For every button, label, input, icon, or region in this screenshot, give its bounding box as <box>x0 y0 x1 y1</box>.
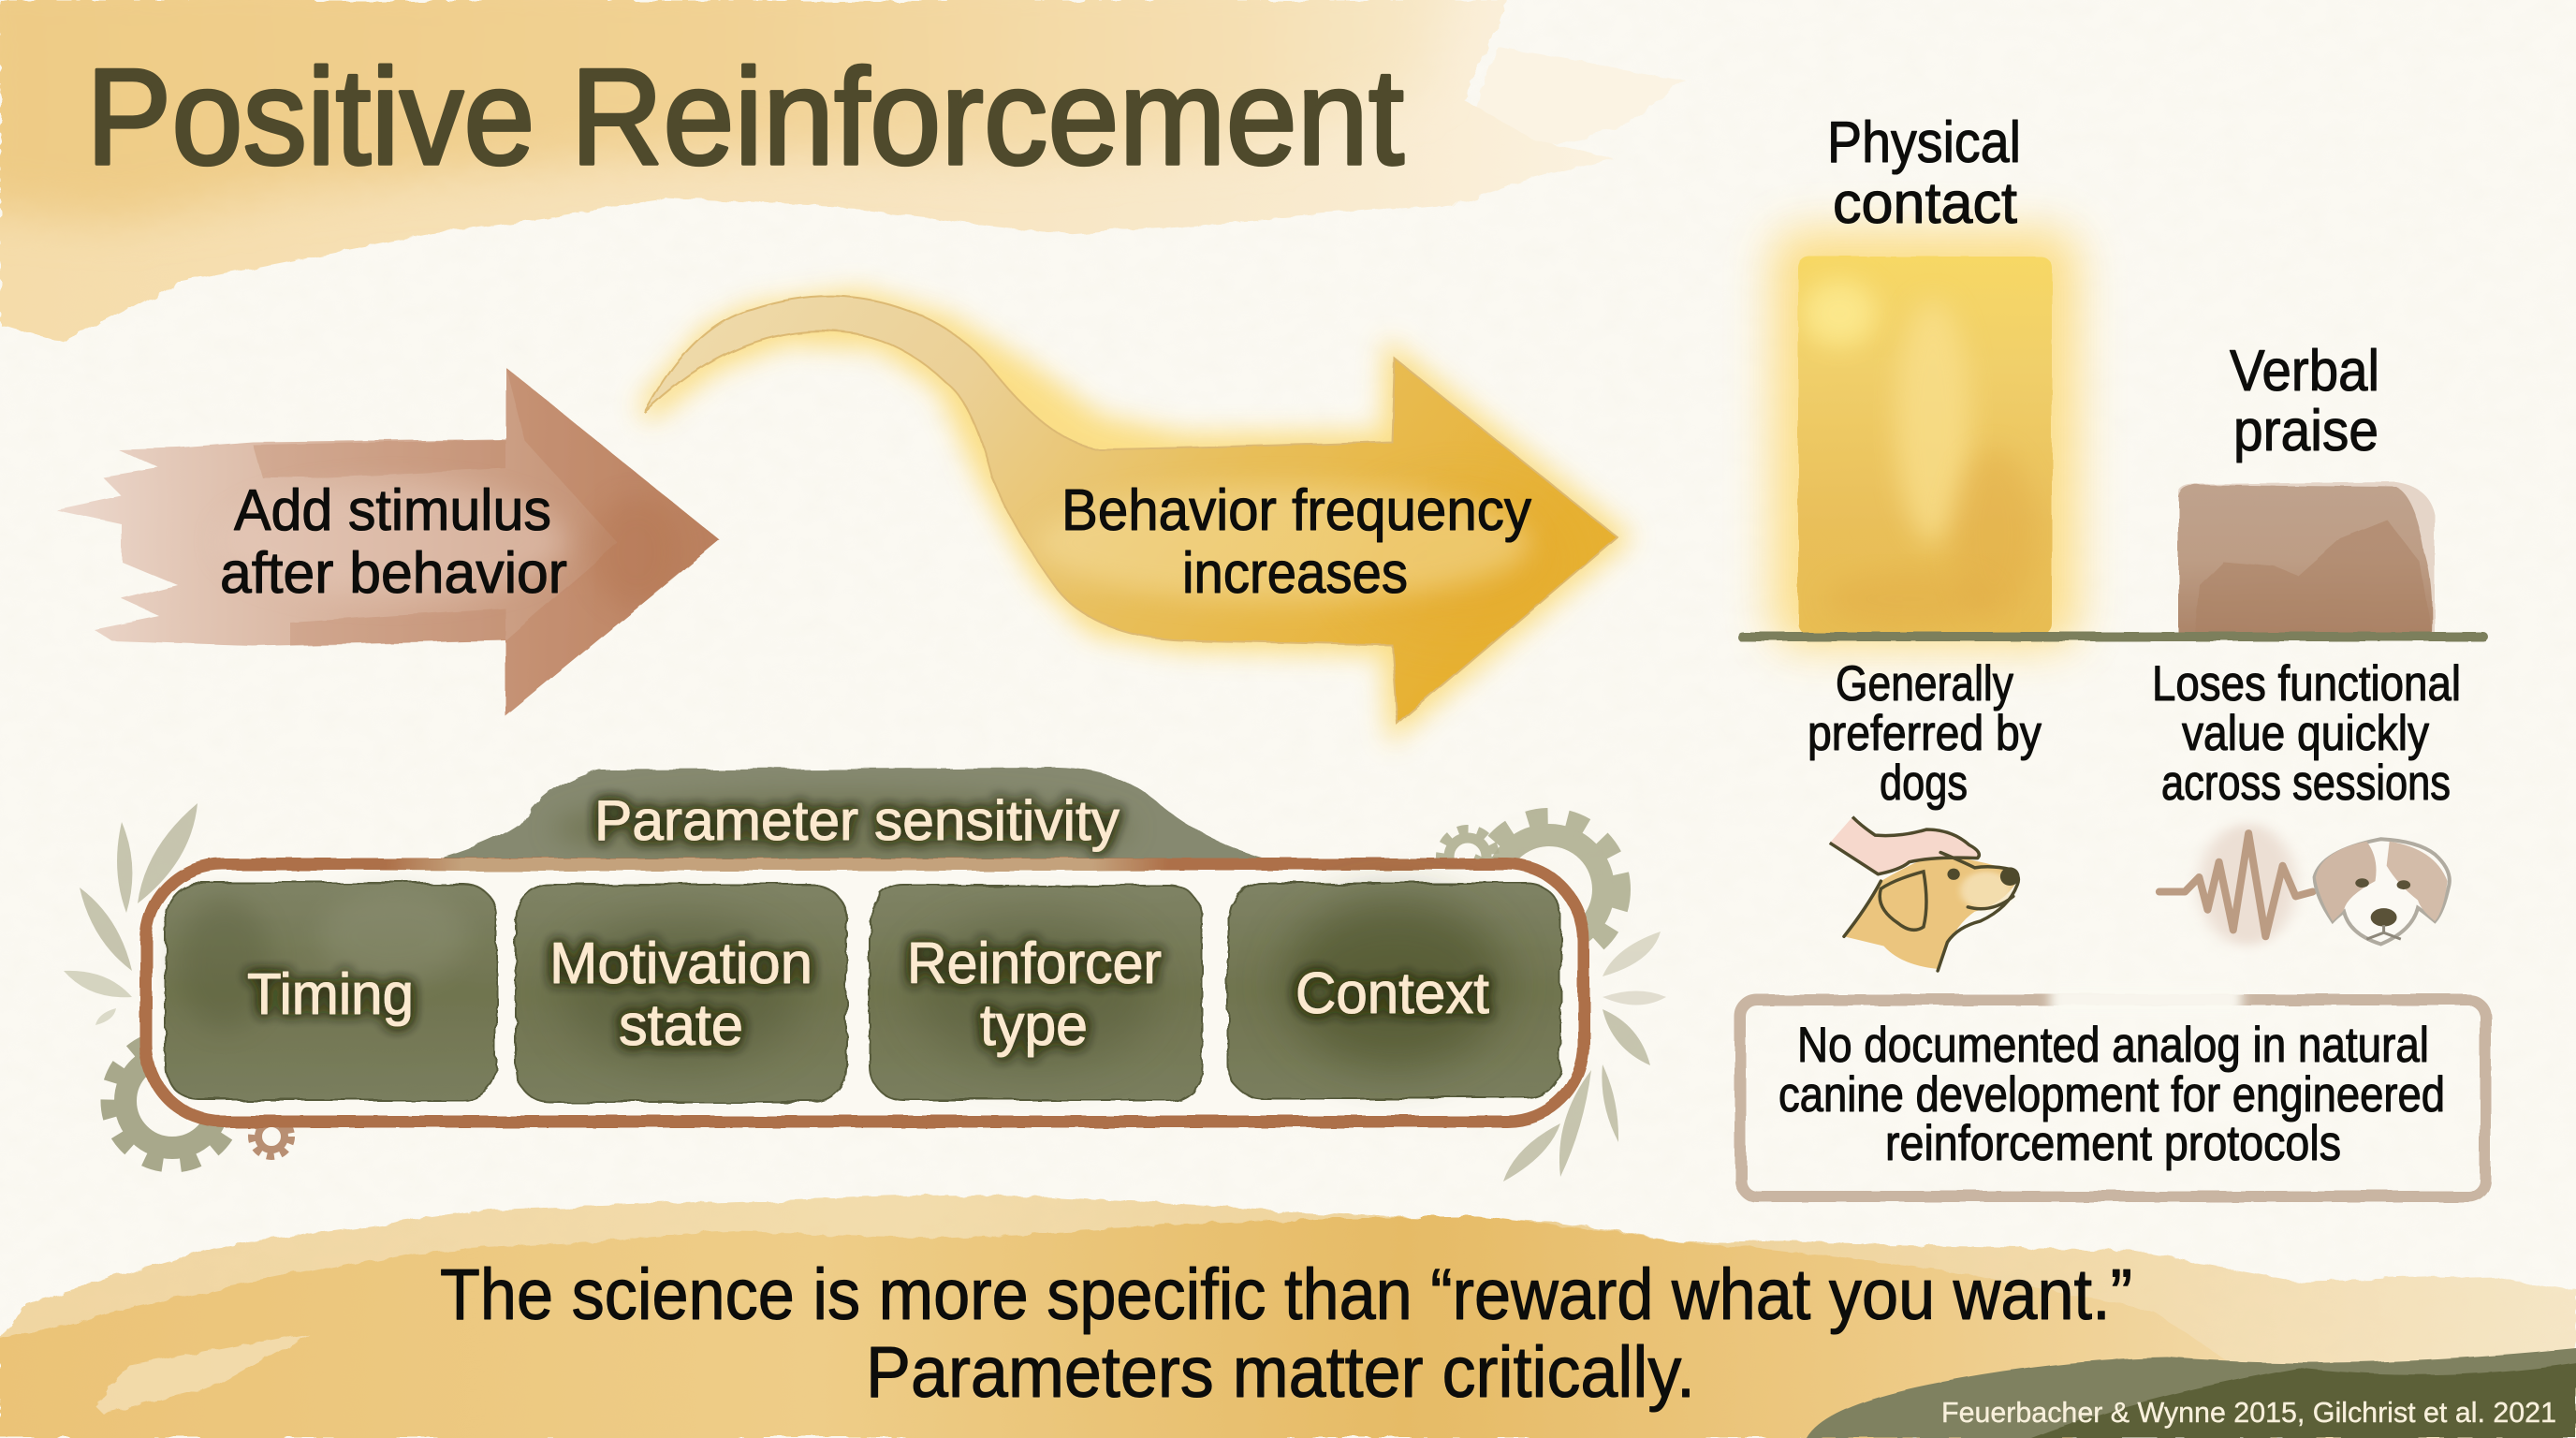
decorative: gears and leaves <box>64 803 1666 1181</box>
label: verbal praise: Verbal <box>2230 339 2379 404</box>
leaves: right branch <box>1503 932 1666 1181</box>
caption: physical contact: preferred by <box>1808 706 2042 761</box>
tab: parameter sensitivity <box>412 768 1261 875</box>
label: verbal praise: praise <box>2233 399 2378 463</box>
caption: verbal praise: Loses functional <box>2152 656 2461 712</box>
bar: physical contact <box>1772 230 2078 647</box>
bottom watercolor wash <box>0 1194 2576 1438</box>
card: motivation state: Motivation <box>549 932 812 996</box>
gear: bottom left small brown <box>252 1117 291 1156</box>
citation corner <box>1807 1348 2576 1438</box>
arrow label: behavior frequency <box>1061 478 1531 606</box>
frame: rounded brown border <box>146 858 1584 1122</box>
caption: verbal praise: across sessions <box>2161 756 2451 811</box>
leaves: left branch <box>64 803 198 1025</box>
tab: parameter sensitivity: Parameter sensitivity <box>594 789 1120 852</box>
arrow label: add stimulus: after behavior <box>220 541 567 606</box>
title: Positive Reinforcement <box>86 40 1404 193</box>
bottom takeaway: The science is more specific than “reward what you want.” <box>440 1255 2132 1335</box>
label: verbal praise <box>2230 339 2379 463</box>
card: context <box>1228 883 1560 1098</box>
label: physical contact <box>1827 110 2021 236</box>
card: motivation state: state <box>619 993 743 1058</box>
callout: no documented analog: canine development for engineered <box>1778 1067 2445 1123</box>
label: physical contact: contact <box>1833 171 2017 236</box>
baseline <box>1737 632 2488 641</box>
callout: no documented analog: No documented analog in natural <box>1797 1018 2429 1073</box>
arrow label: behavior frequency: Behavior frequency <box>1061 478 1531 543</box>
card: timing <box>166 883 496 1100</box>
arrow label: add stimulus <box>220 478 567 606</box>
panel: parameter sensitivity <box>146 768 1584 1122</box>
caption: physical contact: Generally <box>1836 656 2013 712</box>
card: context: Context <box>1295 961 1489 1026</box>
icon: dog face <box>2315 839 2450 944</box>
icon: sound wave <box>2159 824 2313 946</box>
caption: physical contact <box>1808 656 2042 811</box>
card: reinforcer type: Reinforcer <box>907 932 1162 996</box>
caption: verbal praise: value quickly <box>2182 706 2429 761</box>
arrow label: behavior frequency: increases <box>1182 541 1408 606</box>
icon: hand petting dog <box>1830 817 2020 971</box>
caption: verbal praise <box>2152 656 2461 811</box>
bottom takeaway: Parameters matter critically. <box>866 1332 1695 1413</box>
gear: top right large <box>1476 816 1622 962</box>
callout: no documented analog: reinforcement protocols <box>1885 1116 2341 1171</box>
citation corner: Feuerbacher & Wynne 2015, Gilchrist et al. 2021 <box>1941 1396 2556 1429</box>
gear: bottom left large <box>109 1037 236 1165</box>
gear: top right small <box>1441 829 1495 884</box>
arrow: add stimulus <box>56 367 720 716</box>
card: motivation state <box>516 885 846 1102</box>
bar: verbal praise <box>2178 482 2435 635</box>
card: reinforcer type <box>870 885 1202 1100</box>
bottom takeaway <box>440 1255 2132 1413</box>
callout: no documented analog <box>1740 983 2485 1196</box>
card: reinforcer type: type <box>980 993 1088 1058</box>
bar chart: reinforcer preference <box>1737 110 2488 647</box>
arrow label: add stimulus: Add stimulus <box>234 478 551 543</box>
caption: physical contact: dogs <box>1880 756 1968 811</box>
arrow: behavior frequency increases <box>645 296 1617 724</box>
card: timing: Timing <box>247 962 414 1027</box>
top watercolor wash <box>0 0 1685 344</box>
label: physical contact: Physical <box>1827 110 2021 175</box>
